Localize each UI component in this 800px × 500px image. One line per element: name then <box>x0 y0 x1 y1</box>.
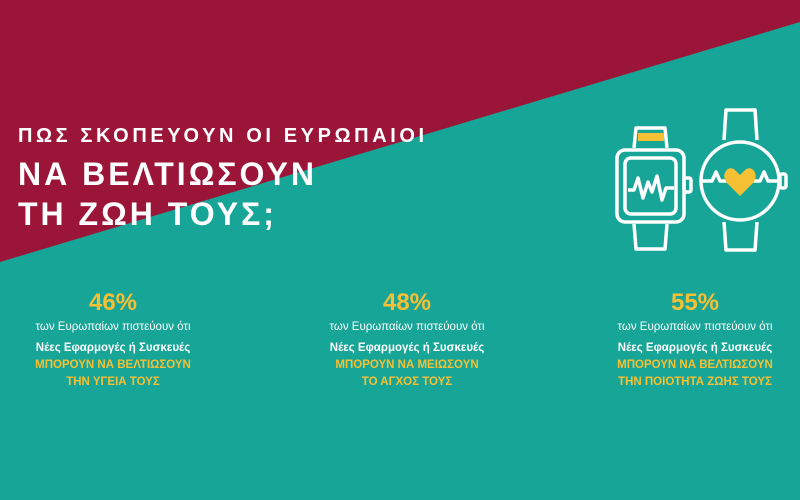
stat: 55% <box>617 289 773 388</box>
stat: 46%: ΜΠΟΡΟΥΝ ΝΑ ΒΕΛΤΙΩΣΟΥΝ <box>35 359 191 371</box>
title: ΠΩΣ ΣΚΟΠΕΥΟΥΝ ΟΙ ΕΥΡΩΠΑΙΟΙ <box>18 125 428 147</box>
stat: 46%: των Ευρωπαίων πιστεύουν ότι <box>35 321 191 333</box>
stat: 48%: Νέες Εφαρμογές ή Συσκευές <box>330 342 484 354</box>
stat: 55%: ΜΠΟΡΟΥΝ ΝΑ ΒΕΛΤΙΩΣΟΥΝ <box>617 359 773 371</box>
icon: square watch <box>617 128 691 249</box>
icon: round watch with heart <box>701 110 786 250</box>
stat: 48%: 48% <box>383 289 431 316</box>
title: ΝΑ ΒΕΛΤΙΩΣΟΥΝ <box>18 156 317 192</box>
stat: 48% <box>329 289 485 388</box>
stat: 46%: Νέες Εφαρμογές ή Συσκευές <box>36 342 190 354</box>
stat: 48%: ΤΟ ΑΓΧΟΣ ΤΟΥΣ <box>362 376 452 388</box>
stat: 55%: 55% <box>671 289 719 316</box>
stat: 48%: των Ευρωπαίων πιστεύουν ότι <box>329 321 485 333</box>
stat: 55%: των Ευρωπαίων πιστεύουν ότι <box>617 321 773 333</box>
stat: 55%: ΤΗΝ ΠΟΙΟΤΗΤΑ ΖΩΗΣ ΤΟΥΣ <box>618 376 772 388</box>
stat: 46% <box>35 289 191 388</box>
stat: 48%: ΜΠΟΡΟΥΝ ΝΑ ΜΕΙΩΣΟΥΝ <box>335 359 479 371</box>
stat: 46%: ΤΗΝ ΥΓΕΙΑ ΤΟΥΣ <box>66 376 160 388</box>
title <box>18 125 428 232</box>
title: ΤΗ ΖΩΗ ΤΟΥΣ; <box>18 196 277 232</box>
stat: 46%: 46% <box>89 289 137 316</box>
icon: smartwatches <box>615 108 788 252</box>
stat: 55%: Νέες Εφαρμογές ή Συσκευές <box>618 342 772 354</box>
